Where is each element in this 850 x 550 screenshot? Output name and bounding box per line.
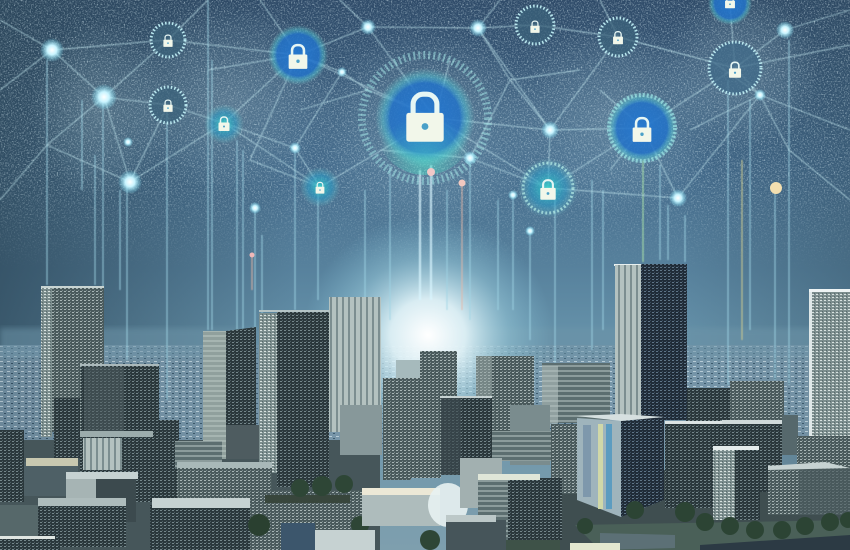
lock node: lower centre [518,158,578,218]
building: blue glass block [577,414,664,517]
speckled data cloud [0,0,850,270]
lock node: upper left of centre [268,25,328,85]
building: twin-tone tower [203,327,259,459]
building: central dark tower [259,310,329,487]
lock node: right [606,92,678,164]
buildings: lower centre [281,458,562,550]
right-side trees and street [570,501,850,550]
buildings: mid row [383,378,577,494]
lock nodes: outlined rings [150,0,761,123]
lock node: lower left [300,167,340,207]
ground behind lower buildings [0,440,850,550]
building: far right tower [809,289,850,444]
network connection lines [0,0,850,200]
lock node: large centre [362,55,488,181]
lock node: teal left [204,104,244,144]
buildings: right cluster [665,415,850,520]
buildings: back row [329,297,784,465]
data haze around the network [30,0,820,230]
buildings: lower left blocks [0,430,272,550]
building: dark glass block left [80,364,222,502]
distant city lights band [0,328,850,445]
vertical light beams [47,0,789,400]
central light glow [303,215,553,455]
building: tall left tower [41,286,104,458]
building: tall right tower [614,264,687,420]
glowing network nodes [40,19,794,258]
trees and plaza near central tower [248,475,440,550]
